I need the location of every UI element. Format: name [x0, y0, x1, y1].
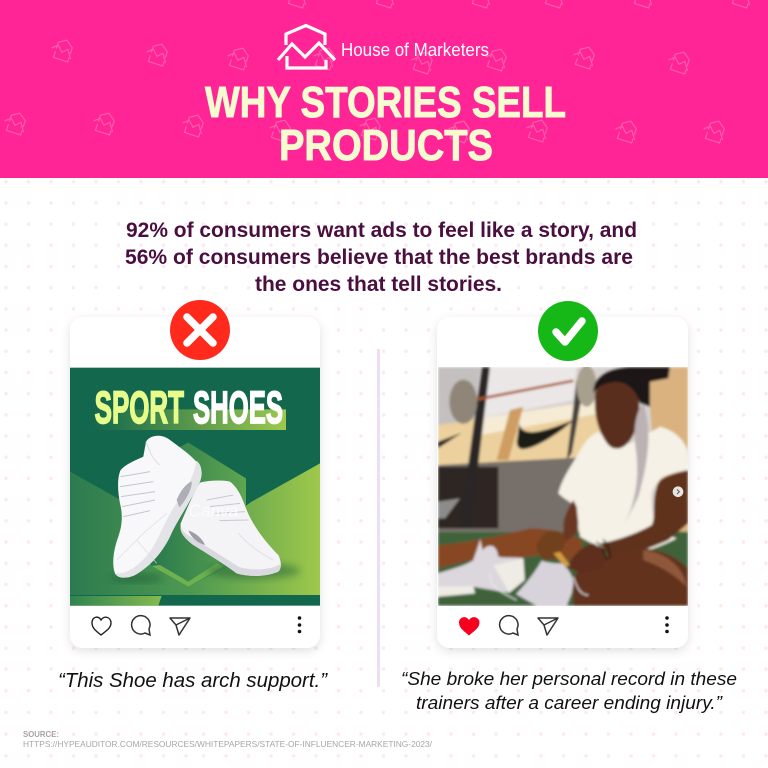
icon: heart outline	[92, 617, 111, 635]
header banner	[0, 0, 768, 178]
caption: good example	[401, 668, 737, 713]
icon: send arrow	[538, 618, 558, 635]
caption: good example: “She broke her personal record in these	[401, 668, 737, 689]
watermark: Canva	[188, 501, 239, 521]
icon: more dots	[298, 616, 301, 633]
caption: good example: trainers after a career ending injury.”	[416, 692, 723, 713]
shoe: left	[113, 436, 202, 578]
icon: filled heart	[459, 617, 480, 636]
caption: bad example: “This Shoe has arch support.”	[58, 670, 328, 692]
icon: house logo	[278, 26, 335, 68]
icon: comment bubble	[500, 616, 518, 635]
title: WHY STORIES SELL	[205, 78, 566, 127]
source note: SOURCE:	[23, 729, 59, 739]
brand name: House of Marketers	[341, 40, 489, 60]
image: sport shoes ad: SHOES	[193, 382, 283, 433]
post card	[70, 317, 320, 648]
icon: more dots	[665, 616, 669, 633]
carousel arrow	[673, 486, 683, 497]
divider	[377, 349, 380, 687]
image: sport shoes ad	[70, 368, 320, 606]
intro statistics text	[125, 219, 637, 296]
icon: red cross badge	[170, 300, 230, 360]
panel: good example post	[437, 301, 688, 648]
intro statistics text: the ones that tell stories.	[255, 273, 502, 296]
icon: comment bubble	[132, 616, 150, 635]
title: PRODUCTS	[279, 121, 493, 170]
source note	[23, 729, 433, 749]
woman	[558, 427, 688, 553]
logo	[278, 26, 489, 68]
source note: HTTPS://HYPEAUDITOR.COM/RESOURCES/WHITEPAPERS/STATE-OF-INFLUENCER-MARKETING-2023/	[23, 739, 433, 749]
ad headline: SPORT	[95, 382, 184, 433]
intro statistics text: 92% of consumers want ads to feel like a story, and	[126, 219, 637, 242]
background dot pattern	[0, 178, 768, 768]
panel: bad example post	[70, 300, 320, 648]
intro statistics text: 56% of consumers believe that the best brands are	[125, 246, 633, 269]
post card	[437, 317, 688, 648]
shoe: right	[181, 481, 281, 576]
icon: green check badge	[538, 301, 598, 361]
image: athlete tying shoes	[438, 365, 688, 606]
title	[205, 78, 566, 170]
icon: send arrow	[170, 618, 190, 635]
